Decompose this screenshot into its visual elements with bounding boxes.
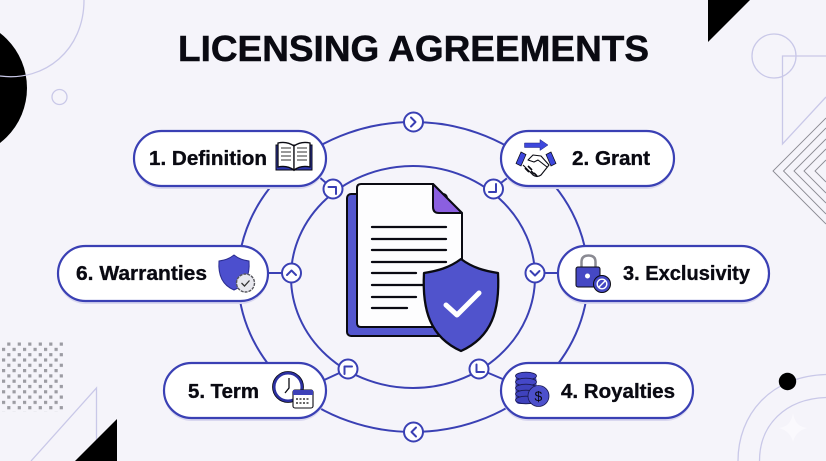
pill: 6. Warranties: 6. Warranties xyxy=(76,263,207,285)
inner ring xyxy=(291,166,535,388)
node: lower-right corner xyxy=(470,360,488,378)
icon: coins with dollar: $ xyxy=(534,388,542,404)
node: left chevron up xyxy=(282,264,301,282)
pill: 1. Definition xyxy=(134,131,326,189)
decoration: bottom-right shapes xyxy=(738,373,826,461)
outer ring xyxy=(238,122,588,432)
central document and shield icon xyxy=(347,184,498,351)
icon: clock and calendar xyxy=(272,372,313,408)
pill: 4. Royalties xyxy=(501,363,693,421)
connectors from inner nodes to pills xyxy=(266,176,560,381)
decoration: top-left shapes xyxy=(0,0,84,158)
pill: 1. Definition: 1. Definition xyxy=(149,148,267,170)
pill: 5. Term: 5. Term xyxy=(188,381,259,403)
node: upper-right corner xyxy=(484,180,503,198)
pill: 3. Exclusivity xyxy=(558,246,769,304)
icon: open book xyxy=(276,142,312,170)
pill: 3. Exclusivity: 3. Exclusivity xyxy=(623,263,751,285)
node: bottom chevron left xyxy=(404,422,423,442)
node: upper-left corner xyxy=(324,180,342,198)
title: LICENSING AGREEMENTS xyxy=(178,28,649,69)
node: top chevron right xyxy=(404,112,423,132)
pill: 2. Grant xyxy=(501,131,674,189)
pill: 6. Warranties xyxy=(58,246,268,304)
decoration: top-right shapes xyxy=(708,0,826,224)
pill: 5. Term xyxy=(164,363,326,421)
icon: handshake with arrow xyxy=(516,140,556,176)
icon: shield with badge xyxy=(219,255,254,292)
decoration: bottom-left shapes xyxy=(0,342,117,461)
node: right chevron down xyxy=(526,264,544,282)
icon: padlock with prohibition sign xyxy=(576,256,610,292)
node: lower-left corner xyxy=(338,360,358,378)
icon: coins with dollar xyxy=(516,372,549,406)
pill: 4. Royalties: 4. Royalties xyxy=(561,381,675,403)
pill: 2. Grant: 2. Grant xyxy=(572,148,650,170)
